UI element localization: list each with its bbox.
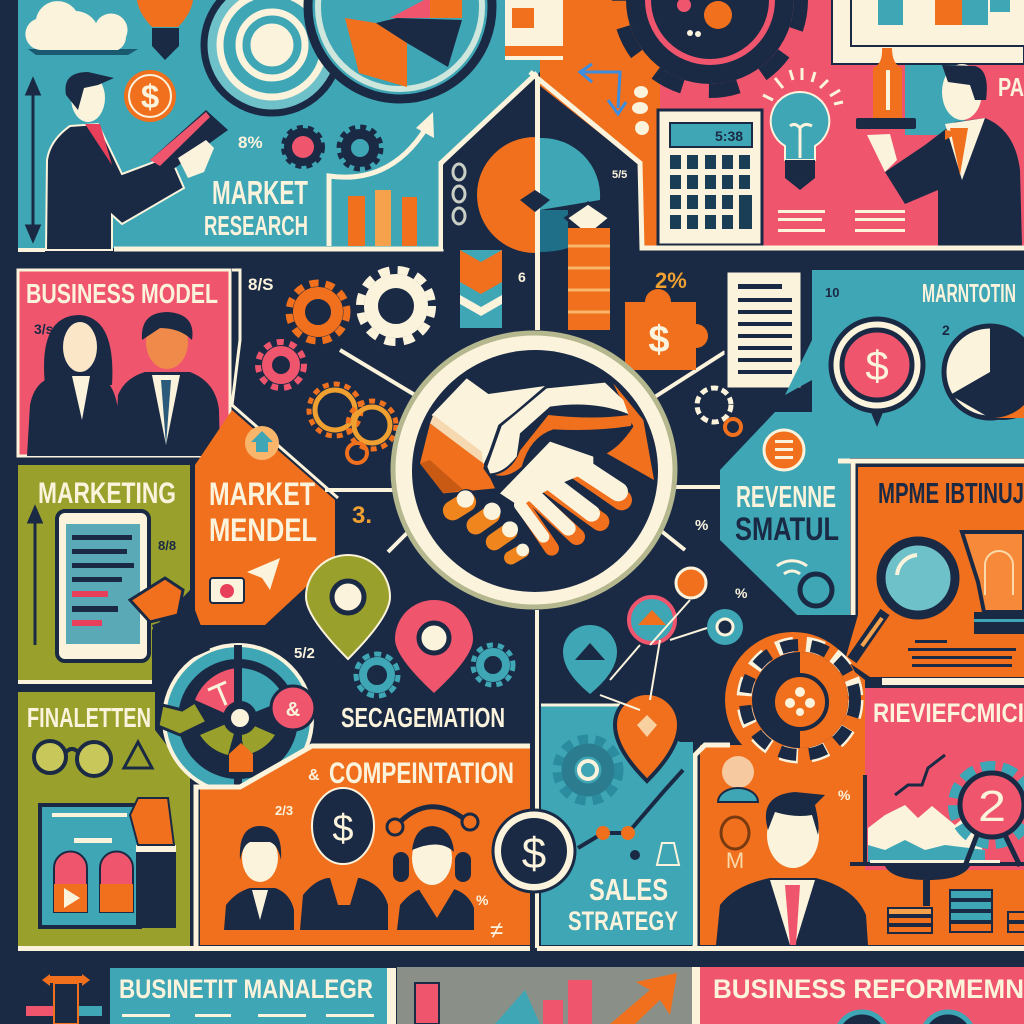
icon: teal gear right bbox=[473, 645, 513, 685]
icon: chevron stack bbox=[460, 250, 502, 328]
panel: business reformement bbox=[692, 967, 1024, 1024]
icon: small gears bbox=[283, 127, 381, 169]
panel: business manager bbox=[110, 968, 396, 1024]
icon: olive pin gear bbox=[306, 555, 390, 659]
icon: large magnifier with pie bbox=[308, 0, 492, 99]
label: ampersand: & bbox=[308, 767, 320, 784]
icon: far sleeve bbox=[607, 383, 654, 480]
heading: segmentation: SECAGEMATION bbox=[341, 702, 505, 733]
panel: marketing bbox=[18, 465, 190, 684]
panel: reviefcmic bbox=[850, 688, 1024, 933]
panel: sales strategy bbox=[493, 693, 693, 945]
icon: hand bbox=[130, 578, 183, 622]
center navy lines bbox=[325, 350, 730, 948]
icon: document bbox=[726, 271, 802, 389]
heading: marketing: MARKETING bbox=[38, 477, 176, 510]
dark connector bbox=[152, 610, 210, 670]
icon: teal gear bbox=[557, 739, 619, 801]
panel: location pins and segmentation bbox=[294, 502, 513, 733]
icon: woman portrait bbox=[718, 756, 758, 802]
bar chart bbox=[348, 190, 417, 246]
icon: flask bbox=[657, 843, 679, 865]
callout: pink badge bbox=[271, 686, 315, 730]
label: 8/3s: 8/S bbox=[248, 275, 274, 294]
icon: partial circles bbox=[836, 1012, 974, 1024]
radial target bbox=[158, 645, 315, 793]
label: percent: 8% bbox=[238, 133, 263, 152]
icon: pink pin gear bbox=[395, 600, 473, 693]
label: 2 percent: 2% bbox=[655, 268, 687, 293]
chart board bbox=[850, 755, 1024, 866]
icon: fingers bbox=[437, 486, 534, 569]
icon: teal badge bbox=[245, 426, 279, 460]
callout: pink badge: & bbox=[286, 699, 300, 721]
icon: dollar target: $ bbox=[865, 342, 889, 389]
icon: teal gear bbox=[356, 654, 398, 696]
heading: market mendel: MENDEL bbox=[209, 512, 317, 548]
connections bbox=[600, 600, 707, 710]
icon: up arrow bbox=[29, 508, 41, 645]
icon: brain head bbox=[721, 817, 749, 873]
icon: route arrows bbox=[580, 64, 626, 114]
label: 6: 6 bbox=[518, 269, 526, 285]
network pins bbox=[563, 517, 748, 710]
icon: thumb hand bbox=[483, 379, 633, 483]
heading: revenue smatul: SMATUL bbox=[735, 511, 839, 547]
panel: market research bbox=[18, 0, 540, 250]
figure: person middle: $ bbox=[332, 808, 354, 850]
icon: dollar coin: $ bbox=[141, 78, 159, 115]
label: small notes: % bbox=[838, 787, 851, 803]
heading: market mendel: MARKET bbox=[209, 476, 315, 512]
heading: revenue smatul: REVENNE bbox=[736, 479, 836, 514]
icon: number gear bbox=[954, 767, 1024, 843]
icon: base and post bbox=[885, 866, 970, 906]
arrow: growth bbox=[610, 973, 677, 1024]
icon: orange gear bbox=[289, 283, 347, 341]
label: small text: 8/8 bbox=[158, 538, 176, 553]
heading: market research: RESEARCH bbox=[204, 210, 308, 241]
heading: market research bbox=[204, 174, 308, 241]
icon: camera bbox=[210, 578, 244, 603]
label: 5/2: 5/2 bbox=[294, 645, 315, 662]
label: 2: 2 bbox=[942, 322, 950, 338]
icon: pickaxe bbox=[208, 682, 226, 705]
icon: screen board bbox=[40, 805, 176, 928]
text lines bbox=[778, 210, 905, 232]
gears cluster bbox=[258, 270, 432, 463]
panel: bottom chart bbox=[397, 967, 692, 1024]
heading: market research: MARKET bbox=[212, 174, 308, 211]
label: small fraction: 5/5 bbox=[612, 169, 627, 181]
panel: bottom strip left icon bbox=[26, 974, 102, 1024]
panel: compeintation bbox=[196, 746, 530, 948]
icon: gear pair bbox=[309, 384, 396, 463]
icon: paper plane bbox=[247, 558, 280, 590]
icon: olive arrow bbox=[158, 702, 207, 735]
heading: revenue smatul bbox=[735, 479, 839, 547]
icon: dollar coin bbox=[493, 810, 575, 892]
icon: small node bbox=[707, 609, 743, 645]
pie chart bbox=[477, 137, 600, 253]
icon: magnifier bbox=[852, 541, 955, 660]
label: percent: % bbox=[735, 585, 748, 601]
figure: person left bbox=[224, 826, 294, 930]
icon: triangle bbox=[124, 742, 152, 768]
panel: top finance bbox=[505, 0, 1024, 248]
arrow: trend line bbox=[578, 770, 683, 860]
panel: business model bbox=[18, 270, 230, 456]
icon: raised hand bbox=[130, 798, 174, 845]
label: small notes: 3/s bbox=[34, 321, 54, 337]
label: 3.: 3. bbox=[352, 502, 372, 529]
central handshake bbox=[393, 333, 675, 607]
heading: market mendel bbox=[209, 476, 317, 548]
center navy top: pie and stack bbox=[443, 72, 1024, 330]
figure: person middle bbox=[300, 788, 388, 930]
coin stacks bbox=[888, 890, 1024, 933]
label: not equal: ≠ bbox=[490, 917, 503, 944]
icon: orange node bbox=[676, 568, 706, 598]
bar chart bbox=[415, 980, 592, 1024]
icon: brain head: M bbox=[726, 848, 744, 873]
icon: house badge bbox=[229, 743, 253, 772]
figure: businessman bbox=[115, 312, 220, 456]
icon: puzzle dollar: $ bbox=[648, 319, 670, 361]
icon: vertical arrow bbox=[27, 80, 39, 240]
small gear right bbox=[697, 388, 741, 435]
label: clock note: 10 bbox=[825, 285, 839, 300]
icon: top lightbulb bbox=[137, 0, 193, 60]
heading: sales strategy: STRATEGY bbox=[568, 906, 678, 936]
icon: tablet bbox=[57, 511, 149, 661]
icon: pink gear bbox=[258, 342, 304, 388]
heading: sales strategy: SALES bbox=[589, 872, 668, 907]
icon: dollar coin bbox=[124, 70, 176, 122]
panel: revenue smatul bbox=[720, 412, 850, 615]
figure: businesswoman bbox=[27, 315, 118, 456]
heading: business model: BUSINESS MODEL bbox=[26, 278, 218, 309]
heading: sales strategy bbox=[568, 872, 678, 936]
figure: businessman bbox=[716, 792, 868, 945]
icon: orange badge bbox=[764, 430, 804, 470]
icon: stacked coins bbox=[566, 203, 610, 330]
figure: analyst with magnifier bbox=[46, 72, 228, 250]
icon: cream gear bbox=[360, 270, 432, 342]
icon: glasses bbox=[34, 741, 111, 776]
big orange gear bbox=[725, 632, 861, 768]
icon: puzzle dollar bbox=[625, 289, 708, 370]
figure: person with headset bbox=[387, 807, 478, 930]
text lines bbox=[122, 1014, 374, 1017]
icon: document tab bbox=[505, 0, 563, 60]
panel: finaletten bbox=[18, 692, 530, 951]
icon: large magnifier left bbox=[204, 0, 340, 113]
heading: finaletten: FINALETTEN bbox=[27, 702, 151, 733]
panel: mpme ibtinul bbox=[838, 461, 1024, 685]
icon: left sleeve bbox=[432, 378, 545, 465]
panel: marntotin bbox=[785, 270, 1024, 458]
icon: pink node bbox=[629, 597, 675, 643]
label: percent small: % bbox=[695, 517, 708, 534]
chart board bbox=[832, 0, 1024, 64]
panel: lower right orange bbox=[537, 660, 1024, 951]
heading: business manager: BUSINETIT MANALEGR bbox=[119, 974, 373, 1004]
icon: dollar target bbox=[831, 319, 923, 427]
icon: number gear: 2 bbox=[978, 782, 1006, 831]
heading: compeintation: COMPEINTATION bbox=[329, 757, 514, 790]
label: symbols: % bbox=[476, 892, 489, 908]
icon: chain bbox=[453, 164, 465, 224]
icon: top gear bbox=[619, 0, 801, 91]
figure: presenter bbox=[867, 64, 1022, 246]
panel: market mendel bbox=[195, 270, 338, 625]
icon: cloud bbox=[25, 1, 138, 55]
arrow: rising bbox=[329, 112, 434, 246]
icon: orange location pin bbox=[615, 693, 679, 781]
icon: calculator: 5:38 bbox=[715, 128, 743, 144]
label: small note: 2/3 bbox=[275, 803, 293, 818]
trophy stand bbox=[856, 48, 916, 129]
icon: lightbulb bbox=[763, 68, 843, 190]
icon: dollar coin: $ bbox=[522, 829, 546, 878]
icon: signal and node bbox=[777, 561, 832, 606]
icon: calculator bbox=[658, 110, 762, 245]
icon: pie circle bbox=[944, 326, 1024, 420]
icon: teal pin bbox=[563, 625, 617, 694]
icon: lower hand fingers bbox=[520, 460, 622, 548]
icon: orange lightbulb bbox=[962, 532, 1024, 634]
text lines bbox=[908, 640, 1016, 667]
stand bbox=[965, 835, 1020, 866]
small dots bbox=[632, 86, 649, 135]
